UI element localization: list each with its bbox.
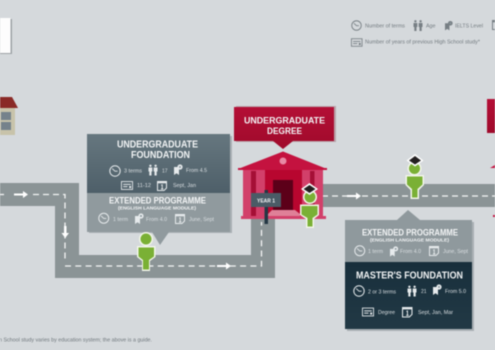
details: foundation stats: Sept, Jan <box>173 183 196 189</box>
legend: IELTS level: IELTS Level <box>455 24 483 30</box>
next building roof, right edge <box>490 165 495 217</box>
details: extended programme stats: 1 term <box>368 249 383 255</box>
panel: undergraduate degree banner: UNDERGRADUATE <box>244 116 325 126</box>
legend: age <box>414 20 436 31</box>
details: master's foundation stats: 2 or 3 terms <box>368 290 397 296</box>
road: right section <box>322 184 495 207</box>
details: foundation stats <box>110 164 207 190</box>
icon: graduate on road <box>406 154 424 199</box>
heading: extended programme: (ENGLISH LANGUAGE MODULE) <box>118 206 196 210</box>
details: extended programme stats: 1 term <box>113 217 128 223</box>
icon: house <box>0 97 18 135</box>
road: left loop <box>0 183 275 278</box>
white box top left <box>0 18 12 54</box>
heading: master's foundation: MASTER'S FOUNDATION <box>356 270 463 282</box>
sign: year 1 <box>251 190 281 224</box>
arrow: bottom road <box>217 262 231 270</box>
icon: student on path <box>137 232 156 271</box>
legend: IELTS level <box>445 21 483 30</box>
road markings: right section <box>322 195 495 197</box>
icon: graduate at building <box>300 183 319 228</box>
legend: number of terms: Number of terms <box>365 24 406 30</box>
arrow: left road <box>14 191 28 198</box>
details: master's foundation stats: Sept, Jan, Mar <box>418 310 453 316</box>
panel: extended programme and master's foundation <box>345 210 474 331</box>
heading: extended programme: EXTENDED PROGRAMME <box>362 228 458 238</box>
next degree banner, right edge <box>487 99 495 133</box>
arrow: down <box>62 226 69 238</box>
panel: undergraduate degree banner <box>234 106 336 149</box>
details: foundation stats: From 4.5 <box>186 168 207 174</box>
details: foundation stats: 11-12 <box>137 183 151 189</box>
heading: extended programme <box>109 196 206 210</box>
heading: extended programme: EXTENDED PROGRAMME <box>109 196 206 206</box>
heading: undergraduate foundation: UNDERGRADUATE <box>117 140 198 150</box>
legend: years of high school: Number of years of previous High School study* <box>365 40 480 46</box>
legend: years of high school <box>351 39 480 46</box>
details: foundation stats: 17 <box>162 168 168 174</box>
details: master's foundation stats: 21 <box>421 289 427 295</box>
details: master's foundation stats: From 5.0 <box>445 289 466 295</box>
details: extended programme stats <box>99 213 215 224</box>
panel: undergraduate degree banner: DEGREE <box>267 126 302 137</box>
details: foundation stats: 3 terms <box>124 168 143 174</box>
arrow: right road <box>347 192 361 200</box>
legend: intake calendar <box>492 20 495 30</box>
road markings: left loop <box>0 194 262 266</box>
heading: undergraduate foundation: FOUNDATION <box>131 150 190 161</box>
heading: extended programme <box>362 228 458 242</box>
details: extended programme stats: June, Sept <box>443 249 469 255</box>
details: extended programme stats: From 4.0 <box>400 249 421 255</box>
heading: extended programme: (ENGLISH LANGUAGE MODULE) <box>370 238 450 242</box>
details: extended programme stats: From 4.0 <box>146 217 167 223</box>
details: extended programme stats <box>355 246 469 256</box>
icon: university building <box>238 152 327 219</box>
sign: year 1: YEAR 1 <box>257 198 275 204</box>
details: master's foundation stats: Degree <box>378 310 395 316</box>
legend: number of terms <box>352 21 406 30</box>
legend <box>351 20 495 46</box>
panel: undergraduate foundation <box>87 134 232 245</box>
heading: undergraduate foundation <box>117 140 198 161</box>
details: extended programme stats: June, Sept <box>189 217 215 223</box>
details: master's foundation stats <box>354 284 466 317</box>
legend: age: Age <box>426 24 436 30</box>
